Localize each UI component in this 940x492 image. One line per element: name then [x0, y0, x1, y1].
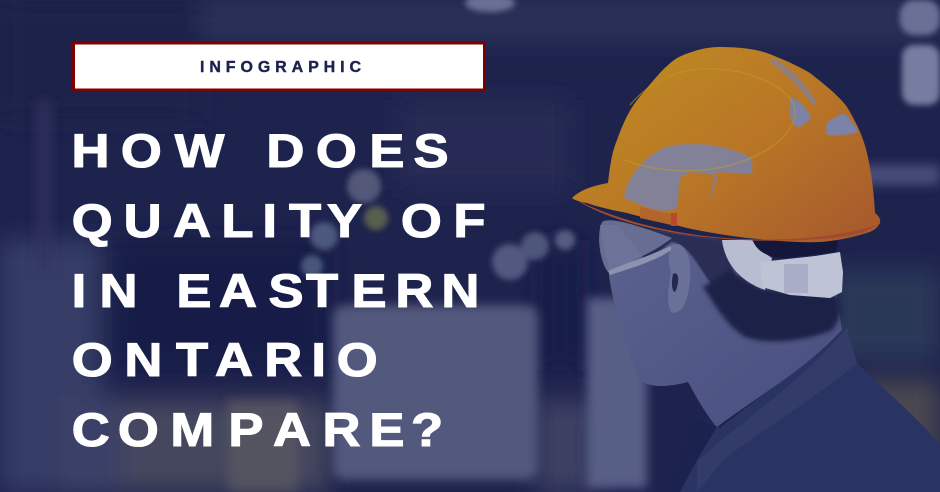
- helmet ribs: [625, 69, 795, 171]
- title: [71, 125, 486, 456]
- helmet reflections: [624, 58, 858, 211]
- safety glasses: [599, 220, 672, 272]
- white head strap: [722, 240, 772, 290]
- neck and face: [600, 225, 842, 427]
- ear: [668, 244, 690, 313]
- title: ONTARIO: [72, 334, 378, 386]
- title: COMPARE?: [72, 404, 443, 456]
- inner collar shadow: [667, 413, 717, 492]
- jacket: [667, 327, 940, 492]
- adjuster bracket: [760, 252, 843, 298]
- title: HOWDOES: [71, 125, 449, 177]
- helmet clip: [640, 207, 676, 226]
- lower hair: [703, 270, 840, 341]
- worker figure: [572, 47, 940, 492]
- banner text: INFOGRAPHIC: [200, 59, 361, 76]
- dark gap under helmet: [753, 240, 838, 258]
- label banner: [74, 43, 484, 90]
- title: QUALITYOF: [72, 195, 486, 247]
- jacket collar: [697, 327, 857, 492]
- helmet brim shade: [575, 199, 877, 241]
- upper hair: [615, 222, 735, 285]
- title: INEASTERN: [72, 265, 479, 317]
- hard hat: [572, 47, 880, 242]
